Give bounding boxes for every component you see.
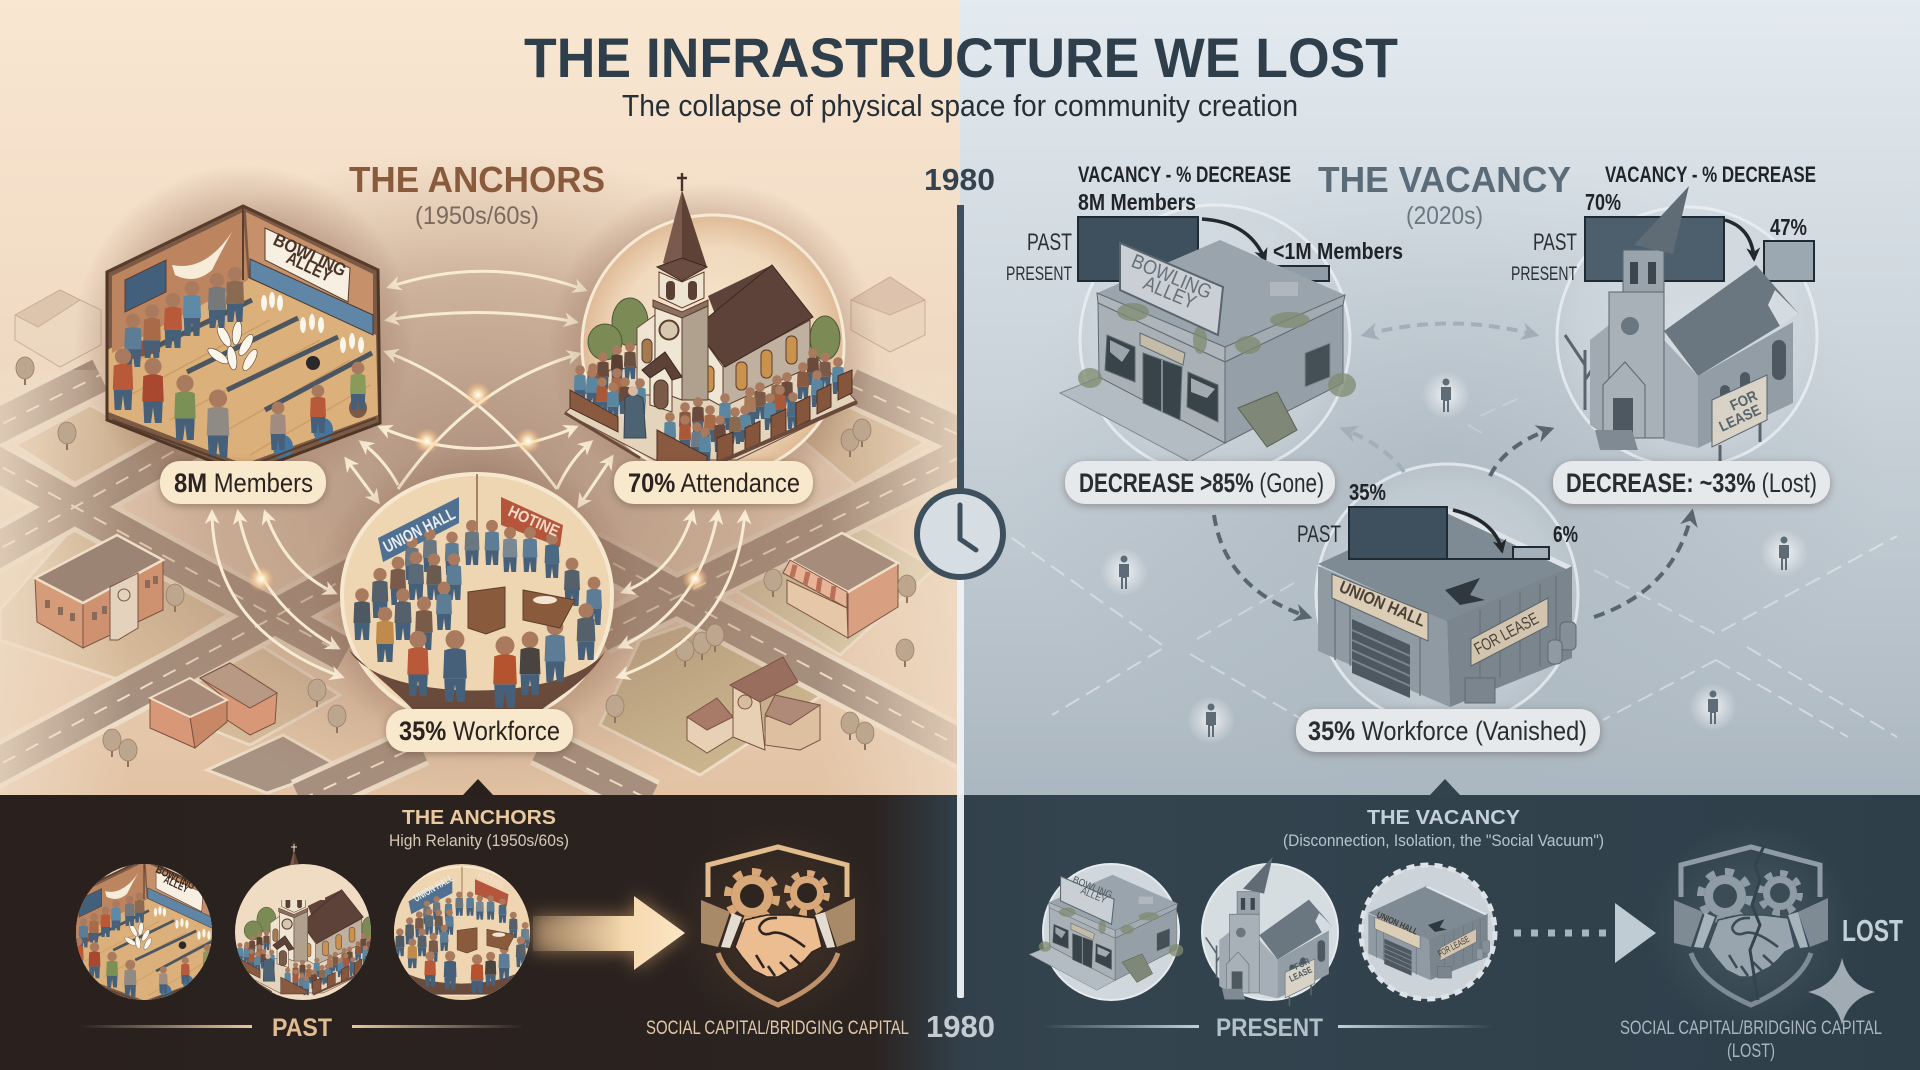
label: 1980 bottom: 1980 [926, 1009, 995, 1044]
section marker: past: PAST [272, 1014, 332, 1042]
band heading: the vacancy: (Disconnection, Isolation, the "Social Vacuum") [1283, 831, 1604, 850]
thumbnail: bowling alley: BOWLING [154, 864, 197, 892]
icon: broken shield [1646, 820, 1856, 1030]
brick building: lower left [150, 663, 277, 748]
icon: clock [917, 491, 1003, 577]
map edge fade: left [0, 370, 130, 795]
faded house: upper left [15, 290, 101, 385]
thumbnail: bowling alley: ALLEY [162, 874, 191, 896]
icon: social capital shield [673, 820, 883, 1030]
house: lower right [687, 657, 820, 753]
illustration: bowling alley: BOWLING [270, 229, 349, 281]
isometric town map: past [0, 375, 970, 800]
panel heading: the vacancy: (2020s) [1406, 202, 1483, 230]
band heading: the anchors [389, 807, 569, 850]
bar chart: church attendance [1511, 162, 1816, 285]
title: THE INFRASTRUCTURE WE LOST [524, 26, 1398, 89]
map edge fade: right [820, 370, 957, 795]
icon: sparkle [1808, 958, 1875, 1025]
thumbnail: ruined union hall: FOR LEASE [1436, 934, 1471, 959]
building halos: present [1080, 205, 1817, 726]
stat pill: 35% Workforce [386, 709, 573, 752]
faded house: upper right [851, 277, 925, 352]
stat pill: decrease about 33% [1553, 461, 1830, 504]
panel heading: the vacancy [1318, 159, 1571, 230]
glowing network nodes [248, 382, 708, 592]
stat pill: workforce vanished [1296, 709, 1600, 752]
thumbnail: bowling alley [76, 864, 212, 1000]
illustration: ruined church [1565, 186, 1799, 462]
bar chart: bowling alley membership: <1M Members [1273, 238, 1403, 264]
thumbnail: ruined bowling alley: BOWLING [1071, 875, 1114, 901]
bar chart: church attendance: 47% [1770, 214, 1807, 240]
band pointer: present [1430, 779, 1460, 795]
stat pill: decrease over 85%: DECREASE >85% (Gone) [1079, 468, 1324, 498]
stat pill: decrease over 85% [1065, 461, 1335, 504]
panel heading: the anchors: (1950s/60s) [415, 202, 539, 230]
band pointer: past [463, 779, 493, 795]
thumbnail: ruined bowling alley: ALLEY [1079, 886, 1108, 906]
thumbnail: ruined church [1202, 857, 1338, 1006]
stat pill: 35% Workforce: 35% Workforce [399, 716, 560, 746]
isolated people [1100, 371, 1808, 744]
caption: social capital lost [1620, 1018, 1882, 1062]
bar chart: bowling alley membership [1006, 162, 1403, 285]
bar chart: union workforce: PAST [1297, 521, 1341, 548]
band heading: the anchors: High Relanity (1950s/60s) [389, 831, 569, 850]
illustration: ruined bowling alley: BOWLING [1128, 250, 1215, 304]
trees [16, 357, 916, 767]
subtitle: The collapse of physical space for community creation [622, 88, 1298, 123]
caption: social capital lost: (LOST) [1727, 1041, 1775, 1062]
thumbnail: union hall [389, 864, 535, 1000]
band heading: the vacancy [1283, 807, 1604, 850]
illustration: ruined bowling alley: ALLEY [1140, 272, 1199, 314]
thumbnail: union hall: HOTINE [476, 870, 506, 891]
central warm vignette [28, 150, 928, 810]
dashed arrows: weakened connections [1214, 324, 1692, 617]
panel heading: the anchors [349, 159, 605, 230]
thumbnail: ruined bowling alley [1029, 864, 1183, 1000]
stat pill: 8M Members [160, 461, 326, 504]
bottom summary band [0, 795, 1920, 1070]
bar chart: union workforce: 6% [1553, 521, 1578, 547]
illustration: church [548, 173, 878, 511]
stat pill: 8M Members: 8M Members [174, 468, 313, 498]
thumbnail: ruined union hall: UNION HALL [1375, 910, 1420, 937]
illustration: ruined union hall: FOR LEASE [1471, 609, 1542, 659]
illustration: ruined church: LEASE [1717, 402, 1764, 436]
bar chart: church attendance: VACANCY - % DECREASE [1605, 162, 1816, 187]
illustration: bowling alley [74, 165, 414, 505]
caption: social capital: SOCIAL CAPITAL/BRIDGING CAPITAL [646, 1018, 909, 1039]
arrow: anchors produce social capital [533, 896, 685, 970]
thumbnail: church [235, 841, 371, 1000]
timeline divider [957, 205, 964, 998]
thumbnail: ruined union hall [1361, 865, 1495, 999]
cool vignette [1004, 150, 1884, 790]
thumbnail: ruined church: FOR [1293, 956, 1312, 972]
label: 1980 top: 1980 [924, 162, 995, 197]
illustration: ruined union hall [1318, 506, 1576, 707]
bar chart: bowling alley membership: VACANCY - % DECREASE [1078, 162, 1291, 187]
bar chart: union workforce [1297, 479, 1578, 559]
panel heading: the anchors: THE ANCHORS [349, 159, 605, 200]
panel heading: the vacancy: THE VACANCY [1318, 159, 1571, 200]
bar chart: church attendance: 70% [1585, 189, 1621, 215]
illustration: bowling alley: ALLEY [283, 247, 335, 286]
section marker: present: PRESENT [1216, 1014, 1323, 1042]
connecting arcs between anchors [212, 271, 745, 677]
thumbnail: union hall: UNION HALL [412, 873, 456, 905]
illustration: ruined church: FOR [1728, 387, 1760, 415]
stat pill: workforce vanished: 35% Workforce (Vanished) [1308, 716, 1587, 746]
background: past half [0, 0, 960, 800]
stat pill: 70% Attendance [614, 461, 813, 504]
arrow: dotted broken link [1514, 903, 1656, 963]
bar chart: church attendance: PAST [1533, 229, 1577, 256]
illustration: union hall: UNION HALL [380, 504, 458, 557]
bar chart: bowling alley membership: PRESENT [1006, 264, 1072, 285]
background: present half [960, 0, 1920, 800]
illustration: union hall: HOTINE [505, 503, 562, 541]
section marker: present [1043, 1014, 1493, 1042]
bar chart: church attendance: PRESENT [1511, 264, 1577, 285]
band heading: the anchors: THE ANCHORS [402, 807, 556, 829]
bar chart: bowling alley membership: 8M Members [1078, 189, 1196, 215]
brick building: left [35, 535, 163, 648]
stat pill: decrease about 33%: DECREASE: ~33% (Lost) [1566, 468, 1817, 498]
faded road lines: present [1012, 399, 1897, 737]
illustration: ruined union hall: UNION HALL [1336, 577, 1429, 631]
illustration: ruined bowling alley [1060, 240, 1356, 462]
illustration: union hall [312, 445, 642, 755]
band heading: the vacancy: THE VACANCY [1367, 807, 1521, 829]
stat pill: 70% Attendance: 70% Attendance [628, 468, 800, 498]
bar chart: union workforce: 35% [1349, 479, 1386, 505]
shop: right [783, 533, 898, 638]
section marker: past [80, 1014, 524, 1042]
thumbnail: ruined church: LEASE [1288, 965, 1314, 984]
bar chart: bowling alley membership: PAST [1027, 229, 1072, 256]
